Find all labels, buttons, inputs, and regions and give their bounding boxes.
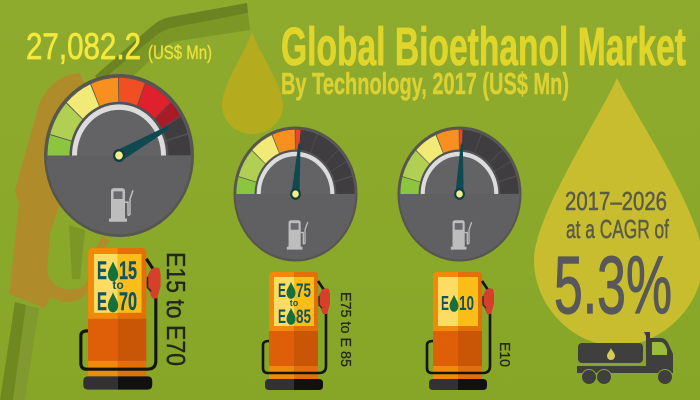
pump: E15 to E70: 70 [119, 288, 137, 316]
pump: E75 to E85: 75 [296, 281, 311, 302]
pump: E75 to E85: to [290, 298, 299, 308]
pump: E15 to E70: E [97, 288, 107, 316]
pump: E15 to E70: 15 [119, 257, 137, 285]
pump: E75 to E85 [263, 272, 330, 390]
stat: 27,082.2 US$ Mn: 27,082.2 [26, 26, 141, 67]
lower fuel pipe [0, 302, 39, 400]
pump: E10 [427, 272, 494, 390]
pump: E15 to E70: E [97, 257, 107, 285]
nozzle handle [9, 73, 100, 308]
stat: 27,082.2 US$ Mn: (US$ Mn) [148, 43, 212, 64]
pump: E75 to E85: 85 [296, 307, 311, 328]
pump: E75 to E85: E [278, 307, 286, 328]
pump: E75 to E85: E [278, 281, 286, 302]
gauge: E15 to E70 [33, 63, 205, 248]
pump: E15 to E70 [81, 248, 161, 390]
small drop [222, 32, 283, 134]
gauge: E75 to E85 [225, 117, 366, 271]
label: E75 to E85: E75 to E 85 [337, 292, 354, 367]
fuel nozzle illustration [0, 3, 250, 400]
pump: E10: E [441, 293, 449, 315]
nozzle lever stub [95, 236, 110, 252]
CAGR drop [534, 78, 700, 346]
pipe wedge [69, 225, 85, 279]
pump: E10: 10 [459, 293, 474, 315]
label: E15 to E70: E15 to E70 [161, 252, 191, 366]
gauge: E10 [389, 117, 530, 271]
icon: tanker truck [577, 332, 673, 384]
CAGR years: 2017–2026 [565, 186, 667, 216]
label: E10: E10 [496, 342, 513, 367]
pump: E15 to E70: to [112, 278, 124, 292]
upper fuel pipe [95, 3, 250, 90]
